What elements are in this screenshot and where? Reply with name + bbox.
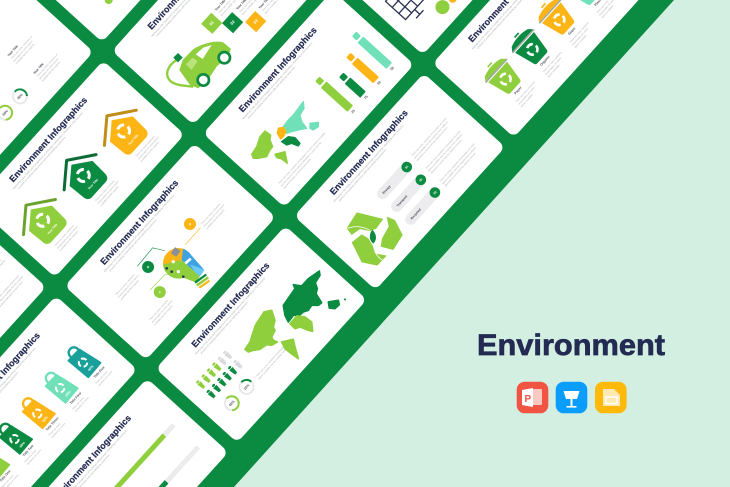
house tag: yellow: available but the majority xyxy=(140,140,160,163)
bag labels: There are many xyxy=(24,448,38,464)
icon: Keynote xyxy=(556,382,587,413)
slide: map with people and donuts xyxy=(156,226,367,443)
icon: solar panel xyxy=(386,0,429,24)
slide: donuts and titles xyxy=(0,0,94,195)
map caption: injected humour or randomised words xyxy=(283,157,312,190)
bulb captions: available but the majority xyxy=(154,304,174,326)
icon: paper bin: of passages of Lorem xyxy=(518,87,535,106)
bulb captions xyxy=(115,190,247,329)
text lines xyxy=(0,256,27,312)
icon: PowerPoint xyxy=(517,382,548,413)
map caption: There are many variations of passages of Lorem Ipsum available, xyxy=(278,131,327,185)
bag labels: Title Three xyxy=(45,416,60,432)
connector lines xyxy=(130,213,209,295)
slide: house tags: process of creating relationships with and satisfying customers. xyxy=(18,136,67,190)
your title block 2: available but the majority xyxy=(41,60,62,83)
pill: recycled: 03 xyxy=(432,190,438,195)
bag labels xyxy=(0,364,113,487)
donut: 40% small: 40% xyxy=(16,93,24,100)
pill descriptions: alteration in some form by injected humour xyxy=(430,139,463,175)
icon: Google Slides xyxy=(595,382,627,413)
diamond 02: 02 xyxy=(229,19,236,26)
pill descriptions: There are many variations of passages of Lorem xyxy=(439,143,476,183)
slide: top cropped xyxy=(21,0,232,42)
icon: organic bin: Organic xyxy=(539,55,551,67)
house tag: yellow: Your Title xyxy=(127,133,139,146)
donut: 60%: 60% xyxy=(228,400,236,407)
diamond 01 xyxy=(201,0,260,34)
your title block 2 xyxy=(32,50,64,83)
icon: organic bin: There are many variations xyxy=(542,50,563,74)
slide: recycling symbol with pills: process of creating relationships with and satisfying customers. xyxy=(338,148,388,202)
icons: padlock bags xyxy=(0,347,101,479)
pill: energy: 01 xyxy=(404,164,410,170)
chart: coloured small world map xyxy=(252,102,318,163)
bulb captions: of passages of Lorem Ipsum xyxy=(203,204,225,228)
icon: organic bin: of passages of Lorem xyxy=(544,57,562,76)
pill descriptions: alteration in some form by injected humour xyxy=(444,152,477,187)
bag: dark green: 60% xyxy=(19,441,26,448)
icon: large recycling symbol xyxy=(347,212,403,266)
pill: transport xyxy=(389,172,429,214)
slide: map with people and donuts: Marketing is the study and management of exchange relationships. Marketing is the business xyxy=(195,276,267,355)
donut caption: Ipsum available, but the majority have suffered xyxy=(258,341,294,380)
bulb captions: available but the majority xyxy=(205,208,226,230)
donut: 25% xyxy=(237,377,256,397)
bulb captions: of passages of Lorem Ipsum xyxy=(117,274,140,299)
small green shape xyxy=(103,0,114,6)
house tag: lime xyxy=(10,187,85,261)
chart: large world map xyxy=(245,271,346,359)
chart: bars: 50 xyxy=(389,66,395,71)
house tag: dark green: There are many variations xyxy=(94,179,116,202)
bag labels: There are many xyxy=(71,396,85,411)
house tag: lime: There are many variations xyxy=(54,224,75,247)
your title block 2: There are many variations of xyxy=(36,53,59,78)
slide: progress bars xyxy=(17,378,228,487)
house tag: dark green: of passages of Lorem Ipsum xyxy=(97,180,119,205)
icon: plastic bin xyxy=(559,0,622,24)
pill descriptions: Ipsum available, but the majority have suffered xyxy=(413,120,449,160)
chart: bars: 50 xyxy=(376,80,382,86)
icon: glass bin: There are many variations xyxy=(569,21,590,44)
slide: recycling symbol with pills xyxy=(294,73,505,290)
pill: recycled xyxy=(403,185,443,227)
heading: Environment: Environment xyxy=(477,329,665,362)
pill descriptions xyxy=(411,117,481,187)
house tag: lime: Your Title xyxy=(46,222,59,235)
marker A: A xyxy=(158,289,163,294)
slide: house tags: Environment Infographics xyxy=(7,95,89,184)
slide: light bulb energy: Marketing is the study and management of exchange relationships. Marketing is the business xyxy=(104,194,175,273)
pictogram: people rows xyxy=(195,350,243,399)
pill descriptions: alteration in some form by injected humour xyxy=(416,126,449,162)
map caption: but the majority have suffered alteration in some form by xyxy=(280,141,323,187)
bag labels: variations of Lorem xyxy=(74,396,90,413)
marker B xyxy=(140,259,157,275)
house tag: yellow: There are many variations xyxy=(135,135,156,158)
slide: light bulb energy: Environment Infographics xyxy=(98,178,180,267)
pill descriptions: There are many variations of passages of Lorem xyxy=(425,130,462,170)
marker circles xyxy=(433,0,459,17)
bag labels: There are many xyxy=(95,370,109,385)
marker B: B xyxy=(146,264,151,269)
bulb captions: available but the majority xyxy=(120,279,140,301)
slide: house tags xyxy=(0,61,185,277)
icon: PowerPoint: P xyxy=(524,394,532,405)
icon: glass bin: Glass xyxy=(567,26,576,36)
slide: left text xyxy=(0,213,46,430)
icon: plastic bin: Ipsum available xyxy=(601,4,615,19)
diamond 03 xyxy=(244,0,299,32)
slide: recycling symbol with pills: Environment Infographics xyxy=(328,108,410,197)
donut caption: There are many variations of passages of Lorem xyxy=(255,338,292,378)
donut: 40% small xyxy=(10,86,30,106)
icon: paper bin xyxy=(478,51,542,112)
house tag: dark green xyxy=(51,143,125,216)
bag: teal: 40% xyxy=(87,364,95,372)
slide: map with people and donuts: process of creating relationships with and satisfying customers. xyxy=(200,301,249,355)
bag: lime xyxy=(0,449,9,479)
slide: light bulb energy: process of creating relationships with and satisfying customers. xyxy=(109,218,158,272)
donut: 25%: 25% xyxy=(243,383,250,391)
your title block 1 xyxy=(7,32,38,65)
chart: bars xyxy=(312,31,397,116)
bag labels: variations of Lorem xyxy=(26,449,42,466)
diamond 02 xyxy=(222,0,281,33)
bag labels: There are many xyxy=(48,422,62,437)
donut: 60% small: 60% xyxy=(2,109,9,117)
donut: 60% small xyxy=(0,103,15,123)
slide: world map with bars: Environment Infographics xyxy=(237,25,319,114)
house tag: lime: of passages of Lorem Ipsum xyxy=(56,225,79,250)
marker D: D xyxy=(188,221,193,226)
bag labels: Title Four xyxy=(69,391,83,405)
house tag: yellow: of passages of Lorem Ipsum xyxy=(137,136,160,160)
bag labels: variations of Lorem xyxy=(50,422,66,439)
bulb captions: There are many variations xyxy=(115,273,136,296)
pill: energy xyxy=(375,159,415,202)
pill: recycled: Recycled xyxy=(410,208,422,220)
your title block 1: available but the majority xyxy=(15,42,36,65)
icon: glass bin: of passages of Lorem xyxy=(571,27,589,46)
donut: 60% xyxy=(222,393,242,413)
marker D xyxy=(182,216,198,233)
diamond 03: 03 xyxy=(252,18,259,25)
chart: bars: 25 xyxy=(350,109,356,114)
slide: padlock bags xyxy=(0,296,137,487)
house tag: dark green: Your Title xyxy=(87,178,99,191)
marker A xyxy=(151,284,168,301)
house tag: lime: available but the majority xyxy=(59,230,79,252)
pill: transport: Transport xyxy=(396,194,408,208)
slide: recycling symbol with pills: Marketing is the study and management of exchange relationships. Marketing is the business xyxy=(333,124,405,203)
bag: yellow: 60% xyxy=(41,415,49,423)
icon: paper bin: There are many variations xyxy=(515,80,536,103)
chart: bars: 75 xyxy=(363,95,369,100)
your title block 1: passages of Lorem Ipsum xyxy=(13,40,34,62)
icon: paper bin: Ipsum available xyxy=(520,93,534,108)
icon: light bulb xyxy=(163,247,210,288)
bag labels: variations of Lorem xyxy=(97,370,113,387)
slide: light bulb energy xyxy=(65,143,276,360)
slide: recycling bins xyxy=(432,0,644,137)
pill: transport: 02 xyxy=(418,177,424,182)
icon: glass bin: Ipsum available xyxy=(574,34,588,49)
bag labels: Title Five xyxy=(93,365,106,379)
your title block 1: There are many variations of xyxy=(10,35,33,60)
pill descriptions: Ipsum available, but the majority have suffered xyxy=(427,133,463,172)
pill descriptions: There are many variations of passages of Lorem xyxy=(411,117,448,157)
house tag: dark green: available but the majority xyxy=(100,185,120,207)
pill descriptions: Ipsum available, but the majority have suffered xyxy=(442,146,477,185)
slide: world map with bars: Marketing is the study and management of exchange relationships. Marketing is the business xyxy=(242,41,314,120)
bulb captions: There are many variations xyxy=(200,202,222,226)
icon: organic bin xyxy=(505,21,569,83)
slide: house tags: Marketing is the study and management of exchange relationships. Marketing is the business xyxy=(12,111,84,190)
slide: world map with bars xyxy=(203,0,414,207)
bulb captions: of passages of Lorem Ipsum xyxy=(151,300,173,324)
slide: map with people and donuts: Environment Infographics xyxy=(189,260,271,349)
your title block 1: Your Title xyxy=(7,44,19,57)
icon: paper bin: Paper xyxy=(513,85,523,95)
diamond 01: 01 xyxy=(208,19,215,26)
slide: solar panel xyxy=(341,0,552,55)
icon: organic bin: Ipsum available xyxy=(547,64,561,78)
house tag: yellow xyxy=(91,98,166,172)
bar: lime xyxy=(81,423,176,487)
your title block 2: passages of Lorem Ipsum xyxy=(39,58,59,80)
bulb captions: There are many variations xyxy=(148,298,170,322)
slide: electric car xyxy=(112,0,323,125)
bar: dark green xyxy=(106,445,200,487)
bag labels: Title Two xyxy=(22,444,34,457)
icon: glass bin xyxy=(532,0,595,53)
pill: energy: Energy xyxy=(382,184,392,195)
bag: mint: 25% xyxy=(64,390,72,397)
icon: electric car xyxy=(167,42,231,88)
your title block 2: Your Title xyxy=(32,62,45,75)
slide: world map with bars: process of creating relationships with and satisfying customers. xyxy=(247,66,297,120)
